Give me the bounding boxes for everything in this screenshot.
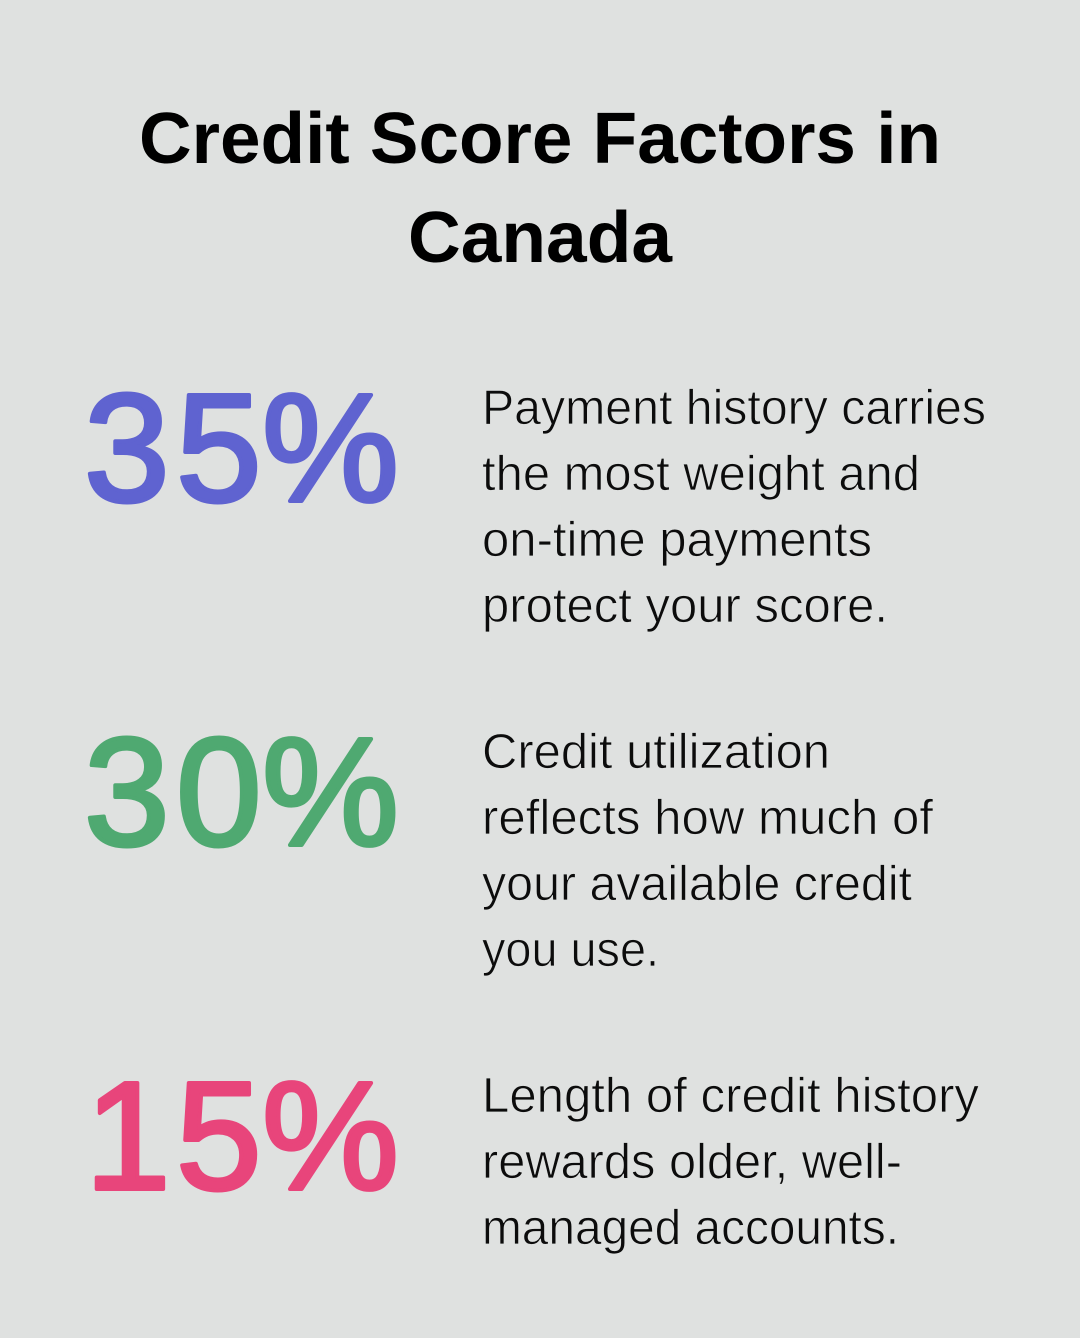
statistic: 30%: 30% — [84, 706, 399, 878]
text block: payment history description: on-time payments — [482, 513, 872, 567]
text block: payment history description: Payment history carries — [482, 381, 986, 435]
text block: length of credit history description: rewards older, well- — [482, 1135, 902, 1189]
statistic: 35%: 35% — [84, 362, 399, 534]
text block: credit utilization description — [482, 725, 933, 977]
title — [139, 99, 941, 278]
title: Credit Score Factors in — [139, 99, 941, 179]
panel: payment history — [84, 362, 986, 633]
text block: credit utilization description: Credit utilization — [482, 725, 830, 779]
text block: credit utilization description: reflects how much of — [482, 791, 933, 845]
statistic: 15%: 15% — [85, 1050, 399, 1222]
title: Canada — [408, 198, 673, 278]
text block: credit utilization description: you use. — [482, 923, 659, 977]
panel: credit utilization — [84, 706, 933, 977]
text block: credit utilization description: your available credit — [482, 857, 912, 911]
text block: payment history description: protect your score. — [482, 579, 888, 633]
text block: length of credit history description — [482, 1069, 980, 1255]
text block: payment history description: the most weight and — [482, 447, 920, 501]
text block: length of credit history description: Length of credit history — [482, 1069, 980, 1123]
text block: payment history description — [482, 381, 986, 633]
text block: length of credit history description: managed accounts. — [482, 1201, 899, 1255]
panel: length of credit history — [85, 1050, 980, 1255]
